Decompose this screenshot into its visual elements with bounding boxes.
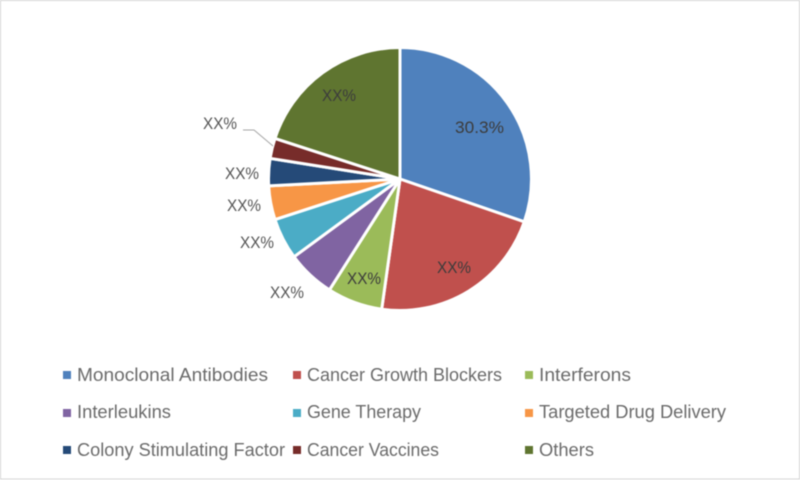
legend item: Gene Therapy: Gene Therapy <box>307 402 421 422</box>
data labels <box>203 86 504 302</box>
label: Targeted Drug Delivery value: XX% <box>227 196 261 215</box>
pie chart <box>269 48 531 310</box>
label: Colony Stimulating Factor value: XX% <box>225 164 259 183</box>
slice: Interleukins <box>294 179 400 290</box>
label: Interleukins value: XX% <box>270 283 304 302</box>
slice: Interferons <box>329 179 400 309</box>
label: Monoclonal Antibodies value: 30.3% <box>455 118 504 137</box>
label: Cancer Growth Blockers value: XX% <box>437 258 471 277</box>
slice: Cancer Growth Blockers <box>382 179 524 310</box>
label: Cancer Vaccines value: XX% <box>203 114 237 133</box>
legend item: Others: Others <box>539 440 594 460</box>
legend item: Monoclonal Antibodies: Monoclonal Antibodies <box>77 365 268 385</box>
legend <box>63 365 726 460</box>
slice: Gene Therapy <box>275 179 400 257</box>
label: Others value: XX% <box>322 86 356 105</box>
legend item: Colony Stimulating Factor: Colony Stimulating Factor <box>77 440 285 460</box>
legend item: Cancer Growth Blockers: Cancer Growth Blockers <box>307 365 502 385</box>
slice: Monoclonal Antibodies <box>400 48 531 222</box>
legend item: Targeted Drug Delivery: Targeted Drug Delivery <box>539 402 726 422</box>
legend item: Interleukins: Interleukins <box>77 402 171 422</box>
slice: Others <box>275 48 400 179</box>
legend item: Interferons: Interferons <box>539 365 631 385</box>
leader line for Cancer Vaccines label <box>243 130 273 146</box>
slice: Colony Stimulating Factor <box>269 158 400 186</box>
slice: Targeted Drug Delivery <box>269 179 400 220</box>
label: Gene Therapy value: XX% <box>240 233 274 252</box>
label: Interferons value: XX% <box>347 269 381 288</box>
legend item: Cancer Vaccines: Cancer Vaccines <box>307 440 439 460</box>
slice: Cancer Vaccines <box>270 138 400 179</box>
